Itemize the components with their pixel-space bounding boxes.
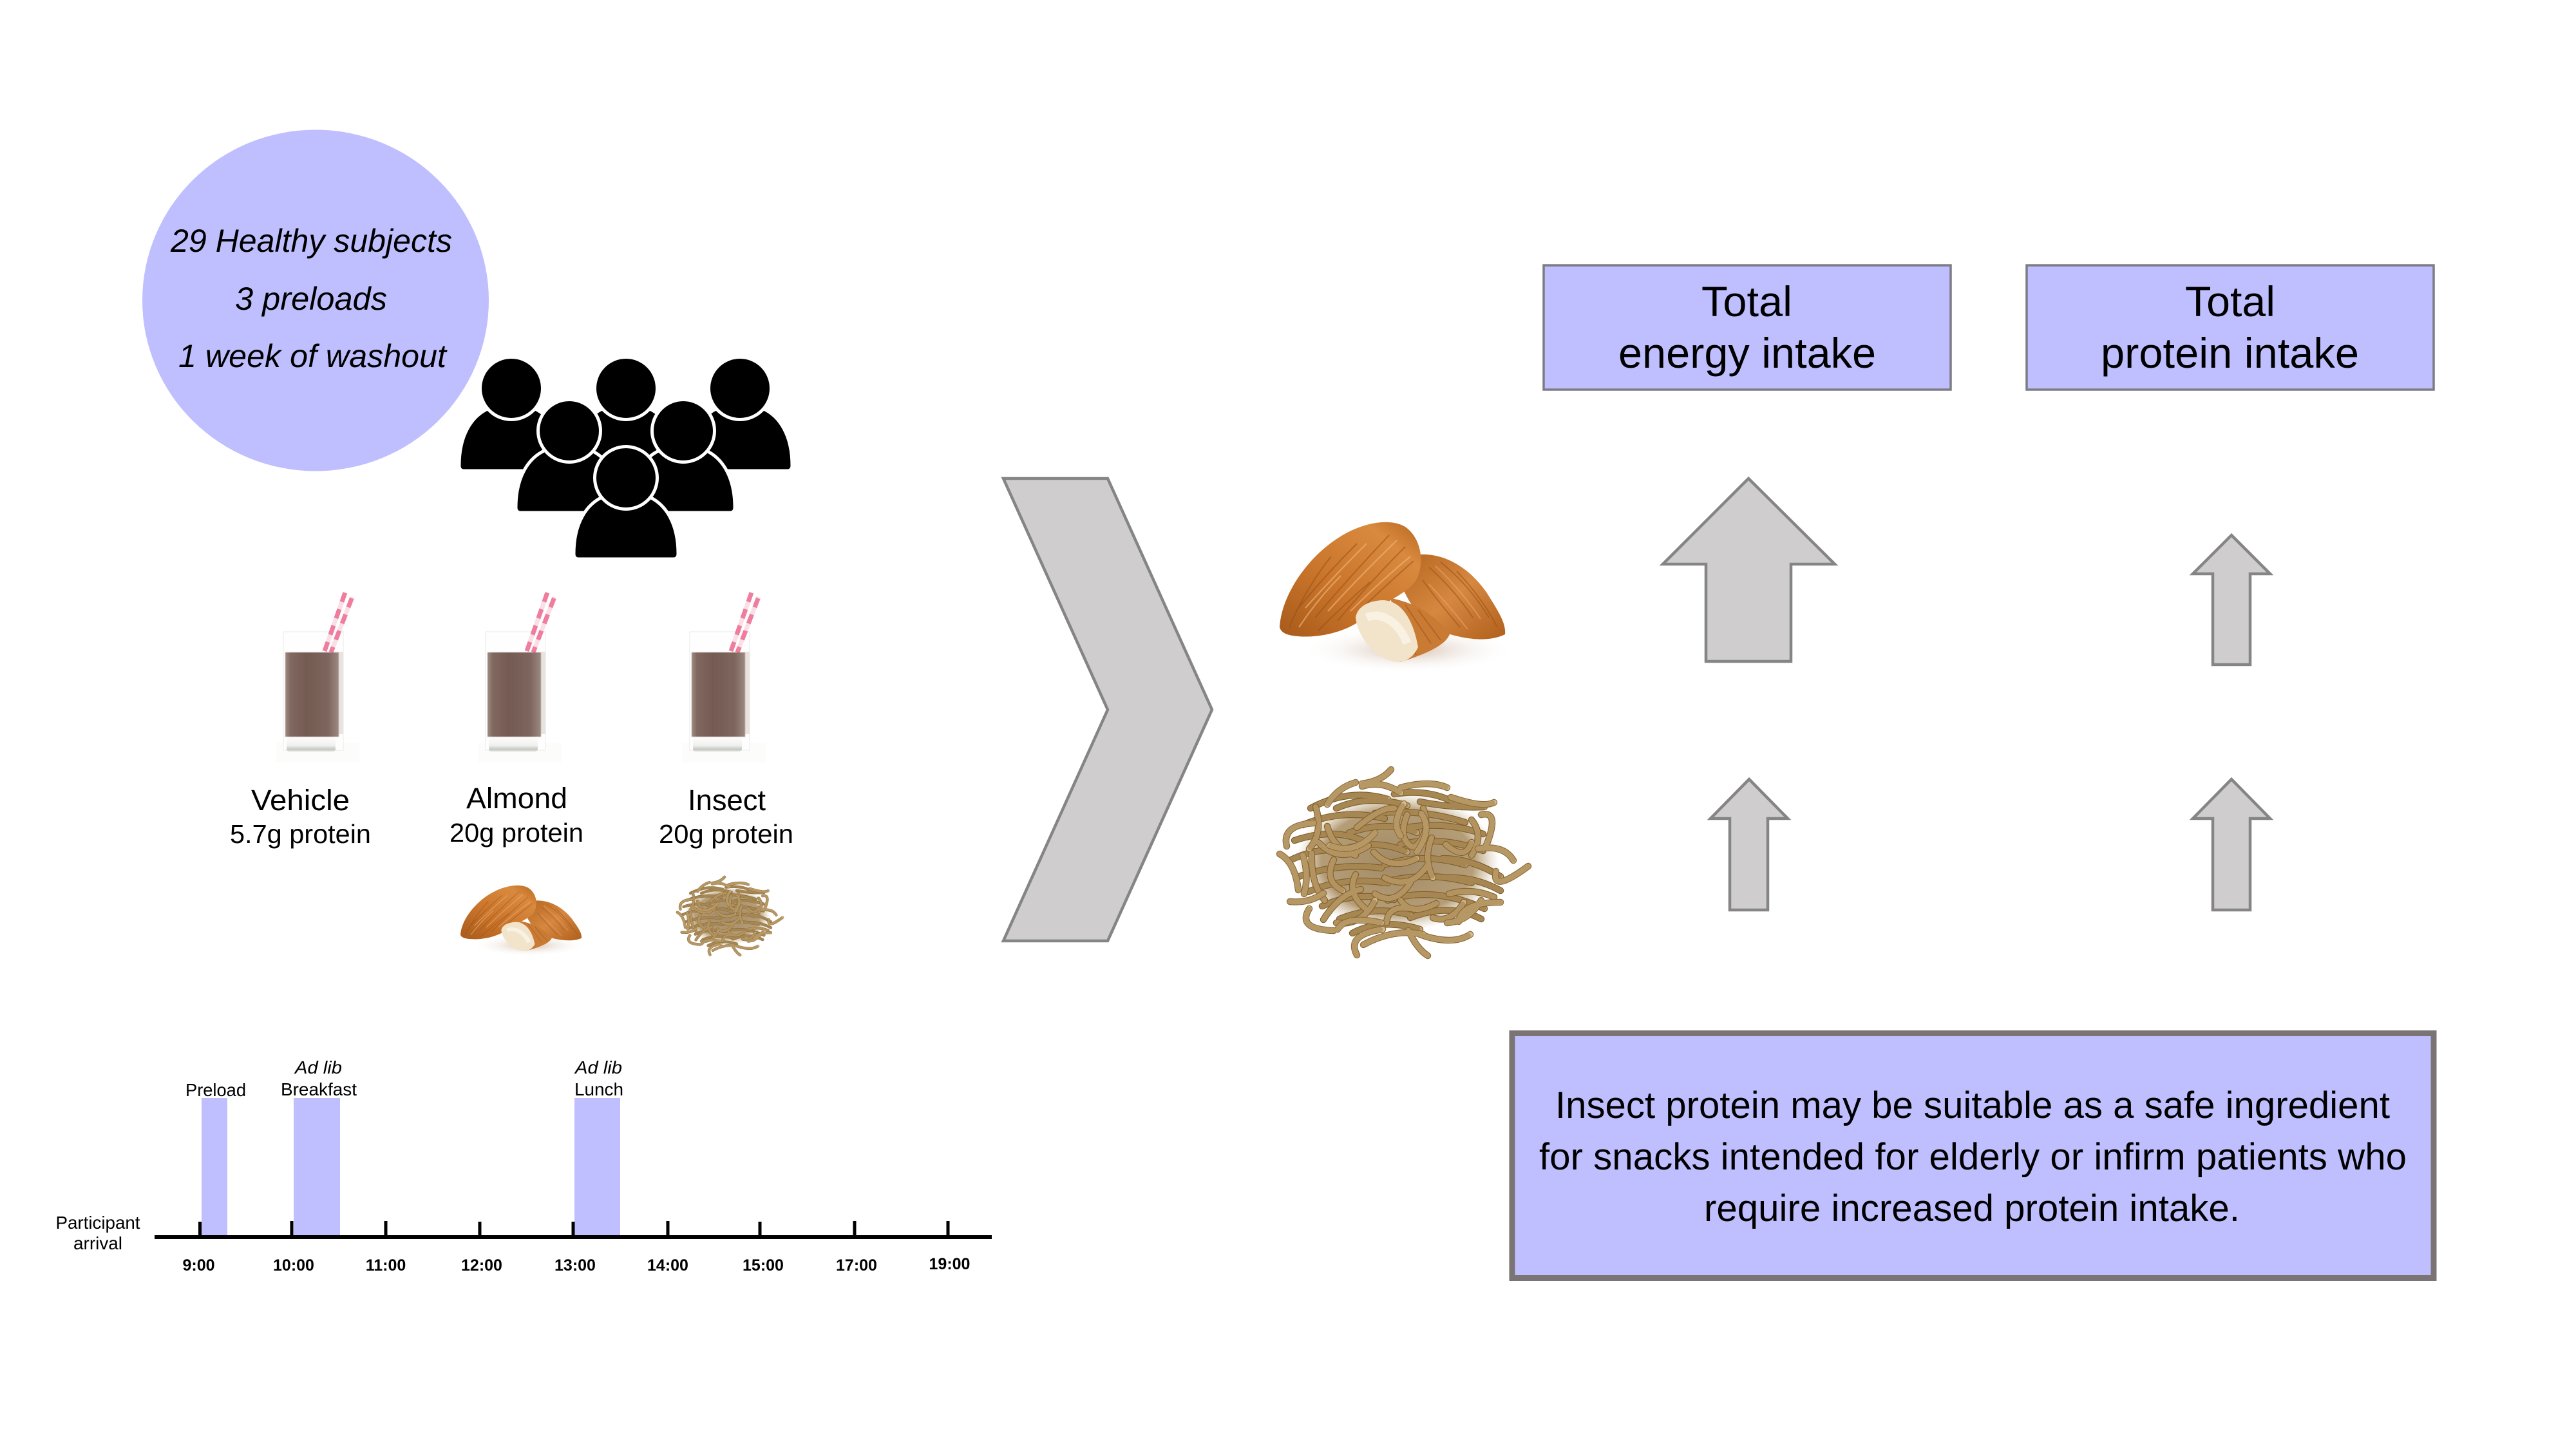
label: vehicle preload: Vehicle [251, 784, 350, 817]
time axis labels: 17:00 [836, 1256, 877, 1274]
icon: almond milkshake [478, 592, 562, 762]
heading: total energy intake [1544, 265, 1951, 390]
image: large mealworms [1280, 770, 1528, 956]
event labels: Lunch [574, 1079, 623, 1099]
label: insect preload: 20g protein [659, 819, 793, 849]
icon: vehicle milkshake [276, 592, 359, 762]
meal and preload bars [202, 1098, 620, 1237]
preloads text: 3 preloads [235, 281, 387, 317]
arrow: almond protein increase [2193, 535, 2270, 665]
label: insect preload [659, 784, 793, 849]
event labels: arrival [73, 1233, 122, 1253]
heading: total protein intake [2027, 265, 2434, 390]
label: almond preload: 20g protein [450, 818, 583, 848]
time axis labels: 12:00 [461, 1256, 502, 1274]
subjects text: 29 Healthy subjects [170, 223, 452, 259]
heading: total protein intake: Total [2185, 278, 2275, 325]
time axis labels: 14:00 [647, 1256, 688, 1274]
label: almond preload [450, 782, 583, 848]
heading: total protein intake: protein intake [2101, 329, 2359, 377]
icon: insect milkshake [682, 592, 766, 762]
label: insect preload: Insect [688, 784, 766, 817]
arrow: insect energy increase [1710, 779, 1788, 910]
arrow: chevron from methods to results [1003, 478, 1212, 941]
icon: small almonds [460, 886, 587, 956]
icon: group of people [459, 357, 792, 559]
study summary circle [142, 130, 489, 471]
image: large almonds [1280, 522, 1515, 673]
icon: small mealworms [677, 877, 782, 955]
conclusion box: for snacks intended for elderly or infirm patients who [1539, 1136, 2407, 1178]
event labels [55, 1057, 623, 1253]
arrow: almond energy increase large [1663, 478, 1835, 661]
time axis labels: 10:00 [273, 1256, 314, 1274]
label: vehicle preload [230, 784, 371, 849]
time axis labels: 13:00 [554, 1256, 596, 1274]
timeline [55, 1057, 992, 1274]
event labels: Preload [185, 1080, 246, 1100]
time axis labels [182, 1255, 970, 1274]
time axis labels: 15:00 [743, 1256, 784, 1274]
label: vehicle preload: 5.7g protein [230, 819, 371, 849]
event labels: Participant [55, 1213, 140, 1233]
conclusion box: require increased protein intake. [1704, 1188, 2240, 1229]
conclusion box [1512, 1033, 2434, 1278]
event labels: Breakfast [281, 1079, 357, 1099]
heading: total energy intake: energy intake [1618, 329, 1876, 377]
label: almond preload: Almond [466, 782, 567, 815]
time axis labels: 9:00 [182, 1256, 215, 1274]
heading: total energy intake: Total [1701, 278, 1792, 325]
event labels: Ad lib [574, 1057, 622, 1077]
washout text: 1 week of washout [178, 338, 448, 374]
time axis labels: 11:00 [366, 1256, 406, 1274]
conclusion box: Insect protein may be suitable as a safe ingredient [1555, 1084, 2390, 1126]
event labels: Ad lib [294, 1057, 342, 1077]
time axis labels: 19:00 [929, 1255, 970, 1273]
arrow: insect protein increase [2193, 779, 2270, 910]
